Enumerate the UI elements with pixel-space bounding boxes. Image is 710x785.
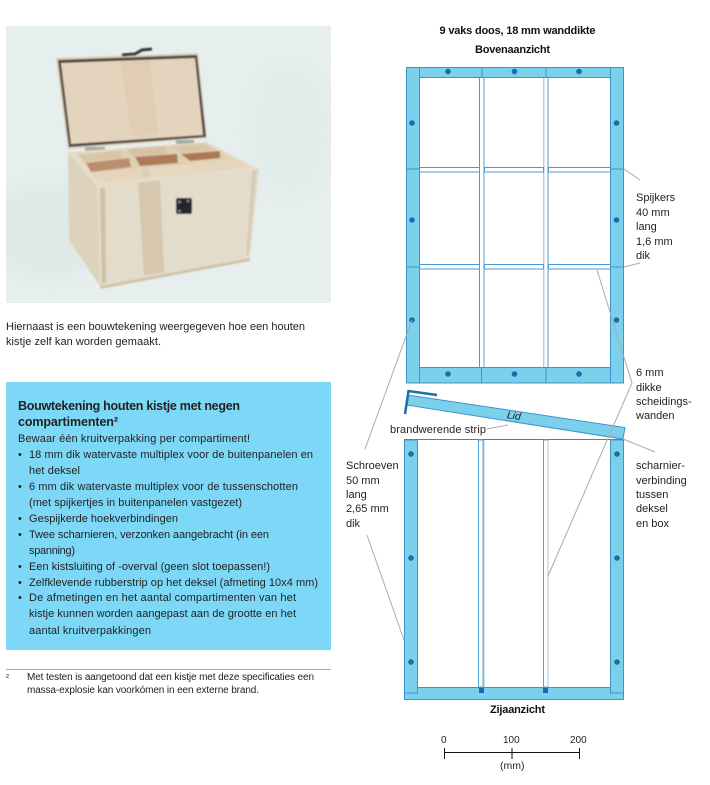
vertical dividers xyxy=(480,78,548,368)
specification list: Gespijkerde hoekverbindingen xyxy=(29,513,178,525)
scale bar: 200 xyxy=(570,735,587,746)
top wall xyxy=(420,68,610,78)
hinges xyxy=(85,147,105,151)
panel: construction specifications xyxy=(6,382,331,650)
drawing: lid xyxy=(405,391,625,439)
scale bar: (mm) xyxy=(500,760,524,772)
specification list: Zelfklevende rubberstrip op het deksel (afmeting 10x4 mm) xyxy=(29,577,318,589)
front face xyxy=(97,169,259,286)
label: nails: Spijkers xyxy=(636,192,676,204)
left wall xyxy=(406,68,420,383)
label: nails: dik xyxy=(636,250,651,262)
specification list: 6 mm dik watervaste multiplex voor de tussenschotten xyxy=(29,481,298,493)
label: hinge xyxy=(636,460,687,530)
compartment interior xyxy=(78,143,232,178)
middle compartments xyxy=(86,158,131,172)
bottom wall xyxy=(420,368,610,383)
specification list: aantal kruitverpakkingen xyxy=(29,625,151,637)
specification list: Bewaar één kruitverpakking per compartiment! xyxy=(18,433,250,445)
label: nails: lang xyxy=(636,221,657,233)
label: hinge: verbinding xyxy=(636,475,687,487)
back compartments xyxy=(80,150,120,162)
heading: top view: Bovenaanzicht xyxy=(475,44,550,56)
box rim xyxy=(68,142,259,187)
specification list: • xyxy=(18,513,22,525)
specification list: 18 mm dik watervaste multiplex voor de buitenpanelen en xyxy=(29,449,313,461)
right side wall xyxy=(610,440,624,693)
horizontal dividers xyxy=(420,168,610,269)
intro paragraph: Hiernaast is een bouwtekening weergegeven hoe een houten xyxy=(6,321,305,333)
specification list: Een kistsluiting of -overval (geen slot toepassen!) xyxy=(29,561,270,573)
label: dividers: scheidings- xyxy=(636,396,692,408)
label: nails: 40 mm xyxy=(636,207,670,219)
label: screws: Schroeven xyxy=(346,460,399,472)
specification list: De afmetingen en het aantal compartimenten van het xyxy=(29,592,296,604)
label: screws xyxy=(346,460,399,530)
floor xyxy=(404,688,624,700)
footnote: massa-explosie kan voorkómen in een externe brand. xyxy=(27,685,259,696)
label: hinge: tussen xyxy=(636,489,668,501)
panel heading: compartimenten² xyxy=(18,415,118,429)
specification list: • xyxy=(18,561,22,573)
footnote: ² xyxy=(6,672,9,682)
side view dividers xyxy=(478,440,548,687)
specification list: Twee scharnieren, verzonken aangebracht (in een xyxy=(29,529,269,541)
specification list: • xyxy=(18,481,22,493)
label: screws: lang xyxy=(346,489,367,501)
label: hinge: deksel xyxy=(636,503,668,515)
specification list: kistje kunnen worden aangepast aan de grootte en het xyxy=(29,608,296,620)
drawing: side view xyxy=(404,440,624,700)
specification list xyxy=(18,433,318,637)
label: hinge: en box xyxy=(636,518,670,530)
photo: wooden box with nine compartments xyxy=(0,26,335,303)
panel heading xyxy=(18,399,240,429)
lid xyxy=(56,53,207,149)
latch xyxy=(176,198,192,214)
right wall xyxy=(610,68,624,383)
label: screws: 2,65 mm xyxy=(346,503,389,515)
footnote xyxy=(6,670,331,696)
panel heading: Bouwtekening houten kistje met negen xyxy=(18,399,240,413)
label: dividers xyxy=(635,367,692,422)
side face xyxy=(68,152,100,286)
clasp xyxy=(122,49,152,55)
leader lines xyxy=(365,169,655,640)
label: dividers: dikke xyxy=(636,382,662,394)
lid label: Lid xyxy=(506,409,523,423)
intro paragraph xyxy=(6,321,305,348)
label: hinge: scharnier- xyxy=(636,460,685,472)
specification list: (met spijkertjes in buitenpanelen vastgezet) xyxy=(29,497,242,509)
specification list: het deksel xyxy=(29,465,80,477)
scale bar xyxy=(441,735,587,772)
intro paragraph: kistje zelf kan worden gemaakt. xyxy=(6,336,161,348)
label: screws: dik xyxy=(346,518,361,530)
scale bar: 100 xyxy=(503,735,520,746)
left side wall xyxy=(404,440,418,693)
front compartments xyxy=(95,168,143,182)
diagram title: 9 vaks doos, 18 mm wanddikte xyxy=(440,25,596,37)
scale bar: 0 xyxy=(441,735,447,746)
specification list: • xyxy=(18,529,22,541)
label: fire-resistant strip: brandwerende strip xyxy=(390,424,486,436)
label: nails: 1,6 mm xyxy=(636,236,673,248)
label: dividers: 6 mm xyxy=(636,367,664,379)
specification list: • xyxy=(18,592,22,604)
drawing: top view xyxy=(406,68,624,383)
label: screws: 50 mm xyxy=(346,475,380,487)
specification list: spanning) xyxy=(29,545,75,557)
label: dividers: wanden xyxy=(635,410,675,422)
specification list: • xyxy=(18,577,22,589)
footnote: Met testen is aangetoond dat een kistje met deze specificaties een xyxy=(27,672,314,683)
fire-resistant strip xyxy=(405,391,437,414)
specification list: • xyxy=(18,449,22,461)
heading: side view: Zijaanzicht xyxy=(490,704,545,716)
label: nails xyxy=(636,192,676,262)
